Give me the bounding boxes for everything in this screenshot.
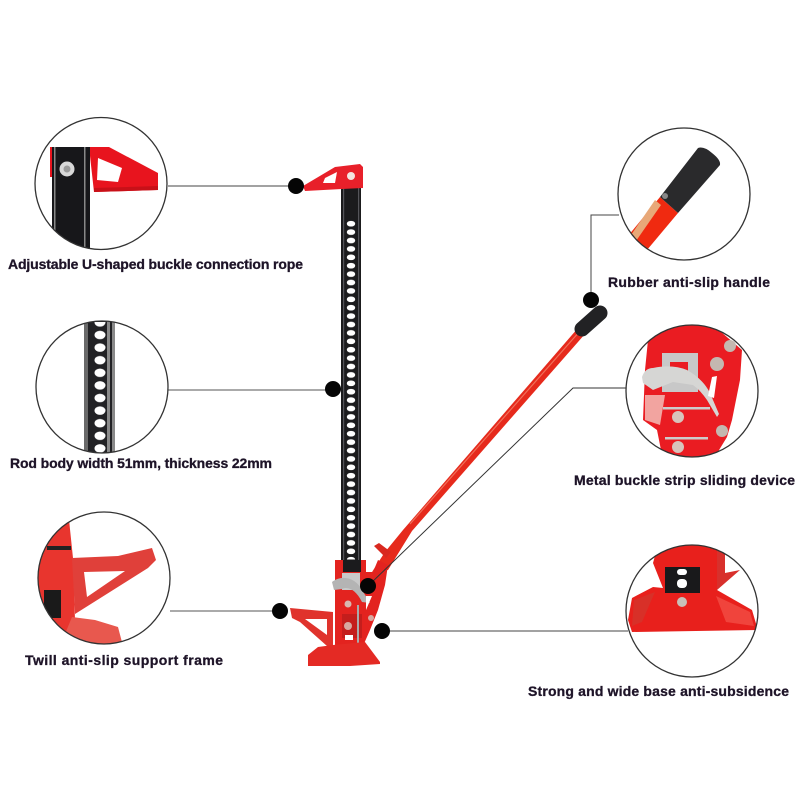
connector: support frame (170, 603, 288, 619)
top clamp (303, 164, 363, 191)
support frame foot (290, 608, 333, 646)
detail circle: support frame (30, 510, 170, 646)
label: wide base: Strong and wide base anti-subsidence (528, 683, 789, 699)
label: rod body: Rod body width 51mm, thickness 22mm (10, 455, 272, 471)
detail circle: U-shaped buckle (35, 118, 167, 257)
label: U-shaped buckle: Adjustable U-shaped buckle connection rope (8, 256, 303, 272)
detail circle: sliding device (626, 325, 758, 460)
label: rubber handle: Rubber anti-slip handle (608, 274, 770, 290)
detail circle: rubber handle (618, 128, 750, 260)
lever handle (372, 313, 600, 572)
connector: base (374, 623, 628, 639)
connector: sliding device (360, 388, 626, 594)
connector: U-shaped buckle (168, 178, 304, 194)
label: sliding device: Metal buckle strip sliding device (574, 472, 795, 488)
label: support frame: Twill anti-slip support frame (25, 652, 223, 668)
main product: high-lift jack (290, 164, 600, 666)
base plate (308, 642, 380, 666)
jack mechanism body (332, 560, 388, 646)
detail circle: rod body (36, 320, 168, 456)
detail circle: wide base (626, 545, 758, 677)
connector: rubber handle (583, 215, 619, 308)
connector: rod body (168, 381, 341, 397)
jack rod with holes (341, 188, 361, 573)
